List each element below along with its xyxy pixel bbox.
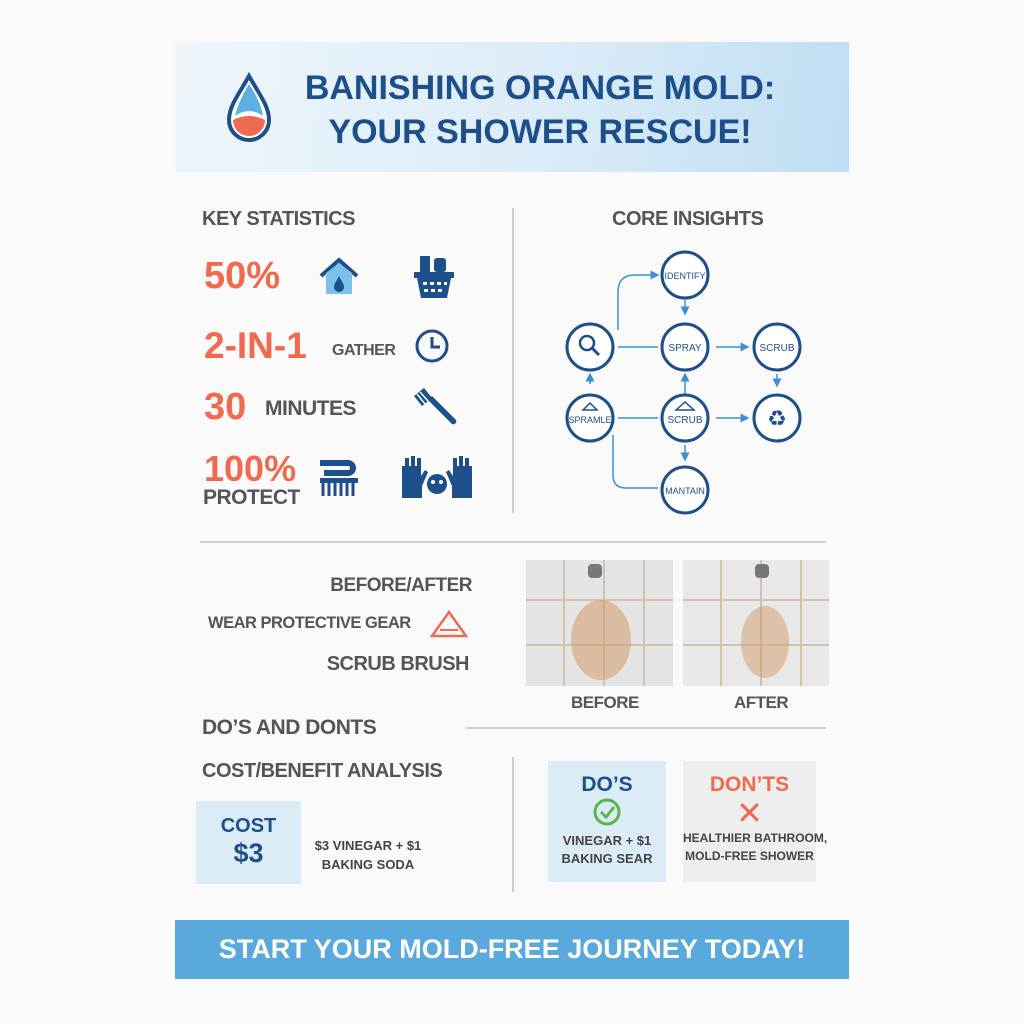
cost text: $3 VINEGAR + $1 — [315, 838, 421, 853]
do's box: BAKING SEAR — [561, 851, 652, 866]
icon: paint brush — [414, 388, 456, 424]
text block: before/after labels: SCRUB BRUSH — [327, 653, 469, 675]
icon: basket — [414, 256, 454, 298]
icon: gloves and mask — [402, 456, 472, 498]
heading: cost/benefit: COST/BENEFIT ANALYSIS — [202, 760, 442, 782]
don'ts box: HEALTHIER BATHROOM, — [683, 831, 827, 845]
title — [305, 69, 775, 151]
icon: water drop — [227, 72, 271, 142]
cost box: $3 — [233, 838, 264, 868]
label minutes: MINUTES — [265, 397, 356, 420]
flow diagram: SCRUB — [759, 343, 795, 354]
text block: before/after labels: WEAR PROTECTIVE GEAR — [208, 614, 411, 632]
caption after: AFTER — [734, 693, 788, 712]
flow diagram: SCRUB — [667, 415, 703, 426]
do's box: VINEGAR + $1 — [563, 833, 651, 848]
flow diagram: ♻ — [767, 406, 787, 431]
text block: before/after labels: BEFORE/AFTER — [330, 575, 472, 596]
don'ts box: ✕ — [736, 795, 763, 831]
footer banner — [175, 920, 849, 979]
title: YOUR SHOWER RESCUE! — [328, 113, 752, 151]
heading: CORE INSIGHTS — [612, 208, 763, 230]
stat 50%: 50% — [204, 255, 280, 297]
panel: core insights — [566, 208, 802, 514]
cost text: BAKING SODA — [322, 857, 414, 872]
stat 100%: 100% — [204, 448, 296, 489]
icon: scrub brush — [320, 460, 358, 496]
flow diagram: SPRAMLE — [568, 415, 612, 425]
caption before: BEFORE — [571, 693, 639, 712]
photo: before — [526, 560, 673, 686]
don'ts box: DON’TS — [710, 773, 789, 796]
stat 30 minutes: 30 — [204, 386, 246, 428]
header banner — [175, 42, 849, 172]
icon: warning triangle — [430, 610, 468, 638]
divider — [200, 541, 826, 543]
flow diagram: MANTAIN — [665, 486, 705, 496]
text block: before/after labels — [208, 575, 472, 675]
heading: KEY STATISTICS — [202, 208, 355, 230]
don'ts box — [683, 761, 816, 882]
heading: do's and donts: DO’S AND DONTS — [202, 716, 376, 739]
stat 2-in-1: 2-IN-1 — [204, 325, 307, 366]
flow diagram: SPRAY — [668, 343, 702, 354]
do's box: DO’S — [581, 773, 633, 796]
label protect: PROTECT — [203, 486, 300, 509]
panel: key statistics — [202, 208, 472, 509]
flow diagram — [566, 250, 802, 514]
cost box — [196, 801, 301, 884]
icon: house — [320, 258, 358, 294]
cost box: COST — [221, 815, 276, 837]
cost text — [315, 838, 421, 872]
title: BANISHING ORANGE MOLD: — [305, 69, 775, 107]
don'ts box: MOLD-FREE SHOWER — [685, 849, 814, 863]
icon: clock — [416, 330, 448, 362]
divider vertical — [512, 208, 514, 513]
photo: after — [683, 560, 829, 686]
do's box — [548, 761, 666, 882]
flow diagram: IDENTIFY — [664, 271, 706, 281]
footer banner: START YOUR MOLD-FREE JOURNEY TODAY! — [219, 934, 805, 964]
label gather: GATHER — [332, 342, 395, 359]
